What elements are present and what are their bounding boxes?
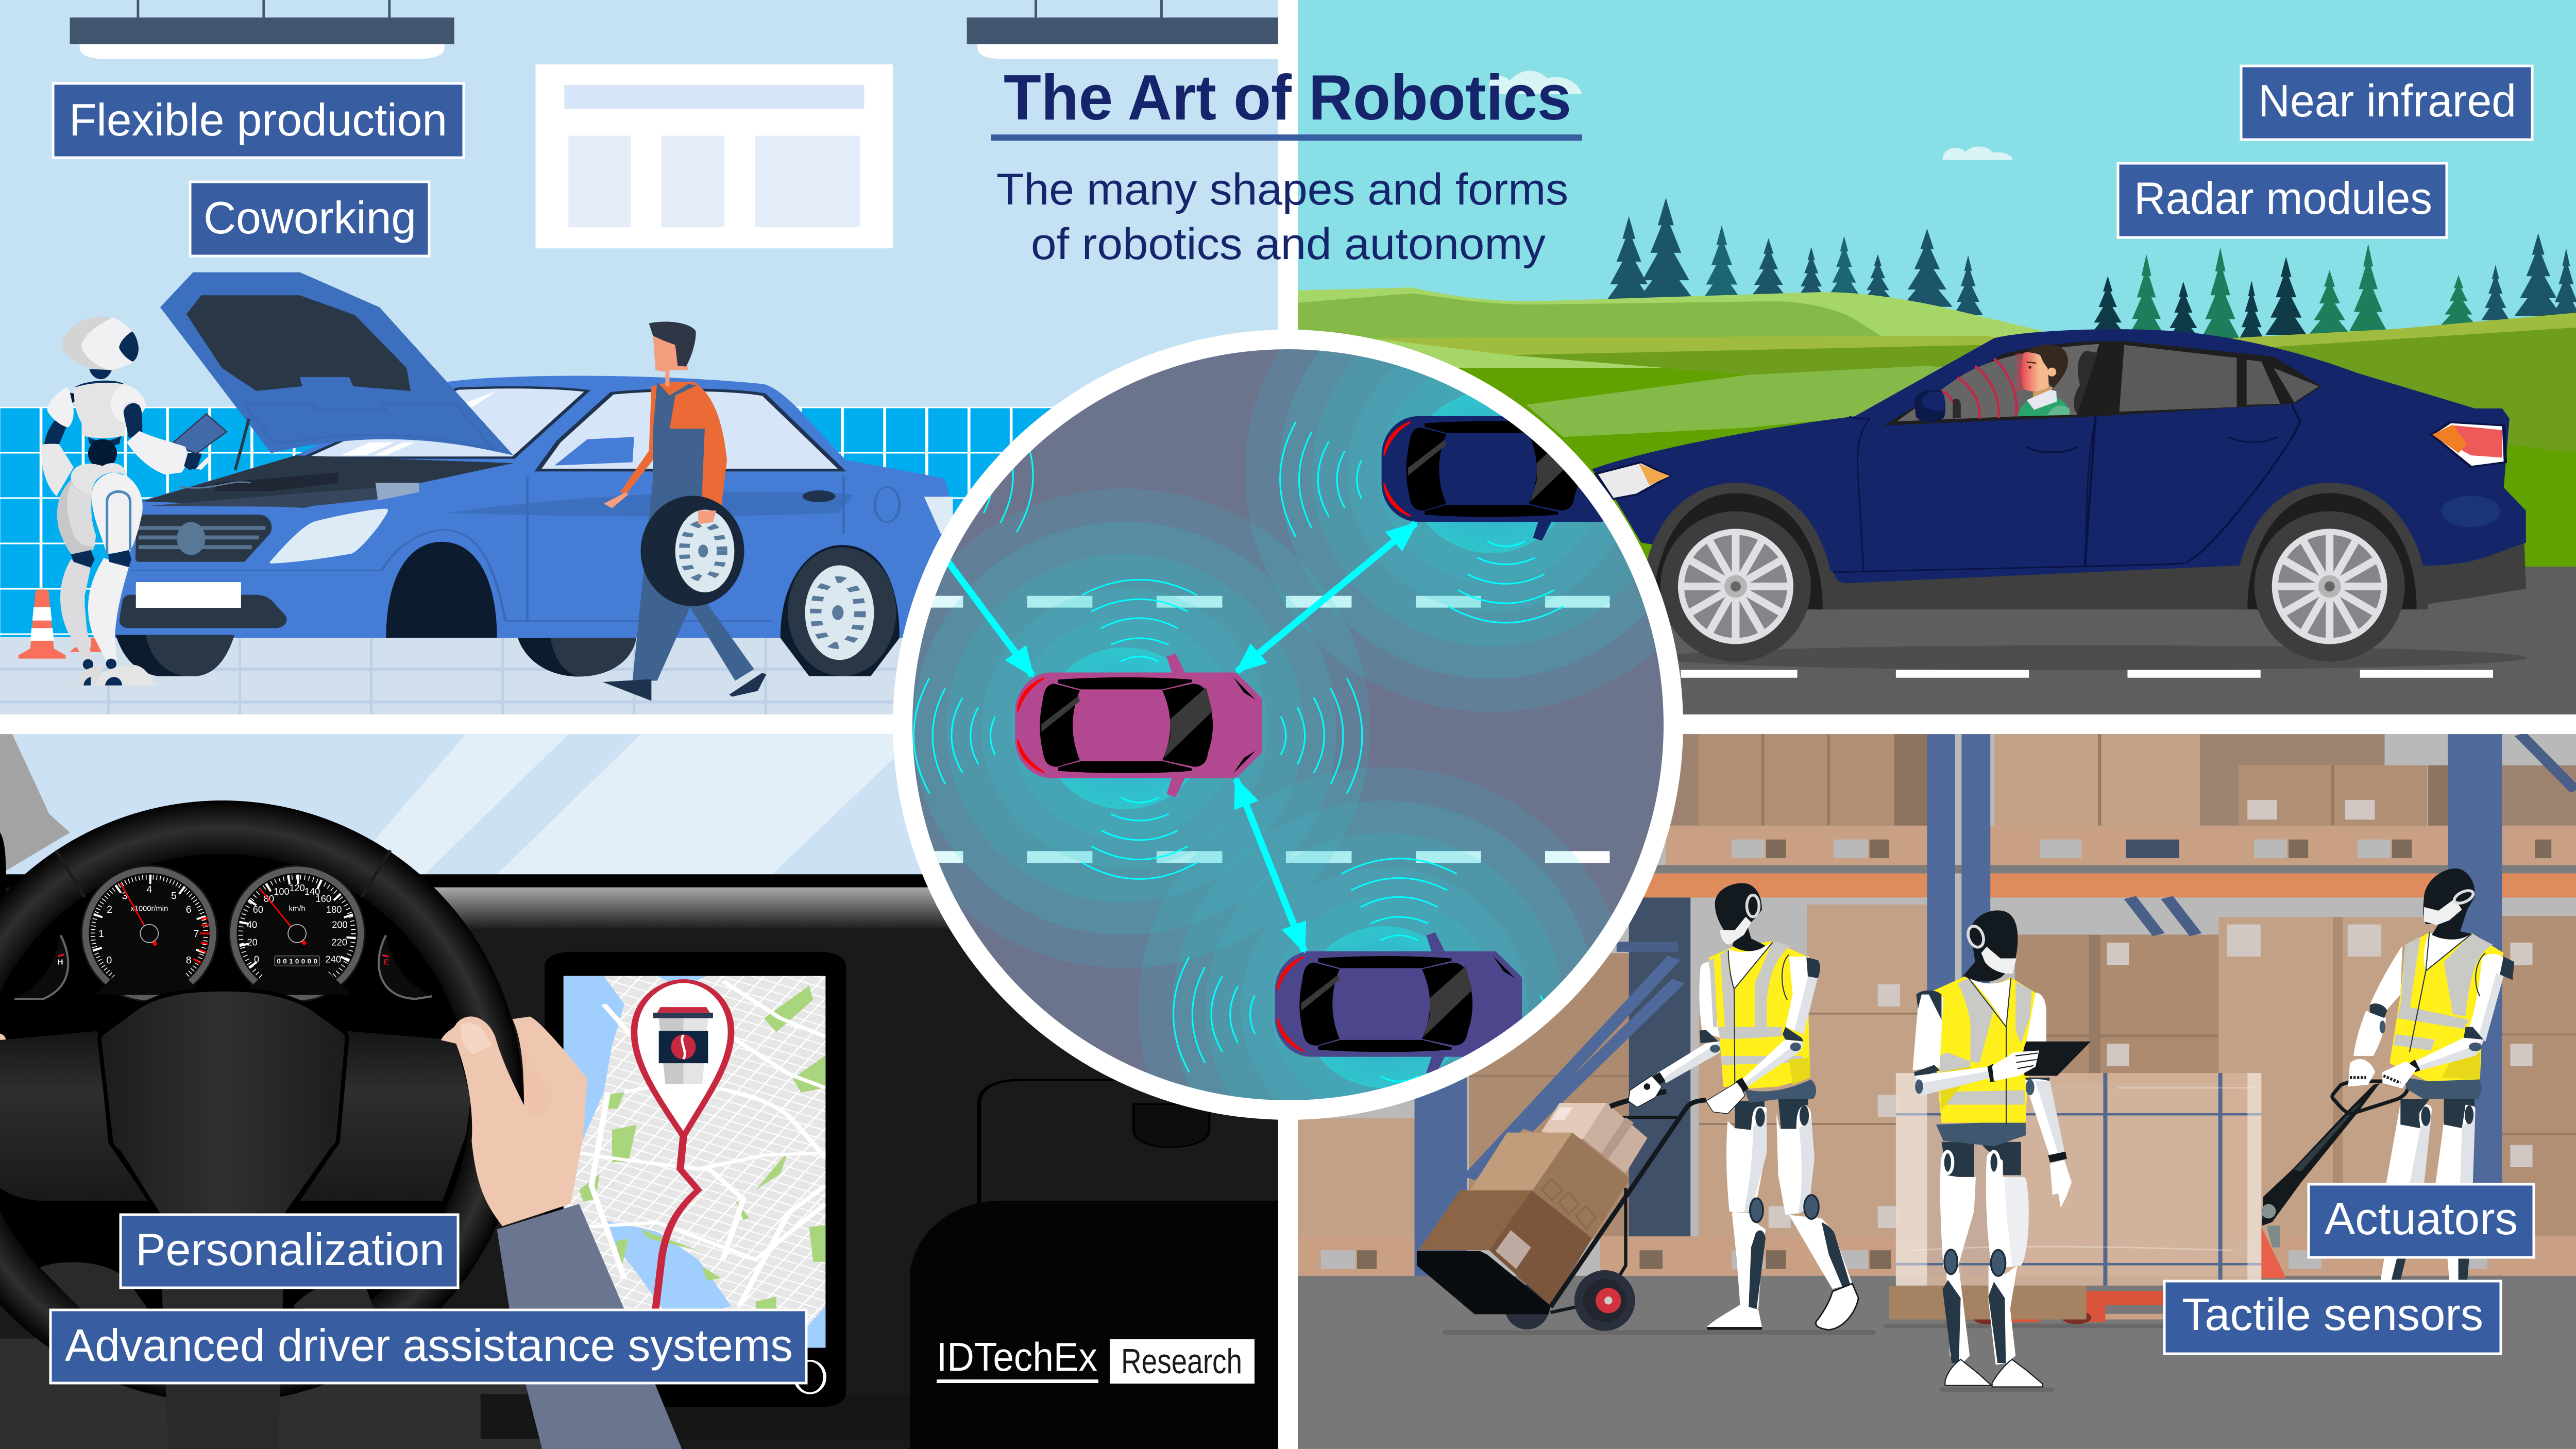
bumper reflector	[2442, 496, 2500, 527]
tail lamp	[2431, 422, 2505, 467]
speedometer: 120	[289, 882, 305, 893]
hand truck and robot one	[1417, 883, 1858, 1331]
pallet truck handle	[2261, 1081, 2408, 1248]
robot one	[1628, 883, 1858, 1330]
wheel spokes	[0, 1031, 471, 1201]
rear windows	[2120, 345, 2319, 412]
side mirror	[554, 437, 634, 466]
route line	[655, 1136, 698, 1310]
wheel interior	[0, 854, 470, 1349]
tachometer: 8	[186, 954, 192, 966]
hips and thighs	[57, 463, 143, 554]
open bonnet	[160, 272, 513, 455]
handle	[1610, 1092, 1666, 1106]
left arm	[1912, 991, 2039, 1096]
front wheel	[1574, 1270, 1635, 1331]
tablet	[2023, 1042, 2091, 1076]
sills and bumper	[1814, 540, 2526, 609]
label: Flexible production: Flexible production	[69, 94, 447, 145]
subtitle: The many shapes and forms	[996, 165, 1568, 214]
left pillar strip	[0, 832, 6, 899]
sky	[1288, 0, 2576, 721]
lower legs	[60, 550, 131, 670]
front arm	[124, 403, 209, 474]
glove compartment	[979, 1080, 1288, 1204]
right arm	[2025, 993, 2072, 1207]
robot three pulling truck	[2348, 868, 2514, 1280]
label: Advanced driver assistance systems	[50, 1310, 806, 1383]
bottom box	[1419, 1190, 1592, 1306]
headlamp	[1596, 462, 1670, 499]
front wheel	[1641, 483, 1834, 661]
circular road scene	[876, 232, 1737, 1247]
signal rings car 3	[1138, 768, 1630, 1247]
driver hand	[441, 1016, 587, 1226]
distant forest left	[1604, 198, 1983, 315]
central circle: connected vehicles	[876, 232, 1737, 1247]
navy car	[1592, 329, 2526, 661]
headlight	[269, 509, 388, 564]
right arm	[2410, 953, 2514, 1072]
speedometer: 200	[332, 919, 348, 930]
panel: car factory coworking scene	[0, 0, 1288, 721]
lane markings	[898, 602, 1609, 857]
windscreen reflection	[341, 391, 497, 455]
side window	[538, 390, 842, 470]
rear wheel	[2235, 483, 2428, 661]
right thigh and shin	[1986, 1150, 2043, 1387]
ceiling lamp left	[70, 0, 454, 59]
legs	[633, 479, 754, 680]
head	[2424, 868, 2475, 940]
hands	[2348, 1059, 2417, 1088]
A pillar	[0, 734, 70, 874]
panel: autonomous car in countryside	[1288, 0, 2576, 721]
arrow between car 1 and car 3	[1236, 779, 1304, 951]
number plate	[136, 582, 241, 608]
left hand	[1628, 1072, 1666, 1107]
rear wheel	[1504, 1285, 1549, 1329]
radar arcs car 2	[1280, 422, 1564, 623]
speedometer: km/h	[289, 905, 306, 913]
map pin with coffee cup	[634, 981, 731, 1136]
tachometer: 0	[106, 954, 112, 966]
label: Near infrared: Near infrared	[2258, 75, 2516, 126]
vest	[1929, 977, 2036, 1124]
shorts	[1744, 1079, 1816, 1103]
speedometer: 20	[247, 936, 258, 947]
tachometer: 7	[193, 928, 199, 940]
traffic cones	[19, 589, 117, 659]
right forearm	[1740, 1027, 1804, 1086]
radar arcs car 3	[1174, 859, 1622, 1158]
shoes	[609, 674, 764, 698]
tachometer	[80, 865, 218, 1002]
door outline	[1833, 416, 2175, 572]
lower wheel column	[159, 1214, 285, 1449]
tachometer: 2	[107, 904, 112, 915]
label: Actuators	[2309, 1184, 2534, 1257]
radar arcs off-screen car	[984, 419, 1033, 532]
left forearm	[1657, 1030, 1720, 1083]
label: Radar modules	[2118, 163, 2447, 237]
lower pallets	[1298, 1236, 2576, 1276]
seat	[2074, 351, 2098, 415]
lower legs under the labels	[2381, 1258, 2459, 1280]
right hand	[1706, 1078, 1749, 1114]
rim stitching marks	[56, 850, 391, 897]
hand truck frame back	[1551, 1117, 1681, 1312]
right leg	[1776, 1099, 1858, 1330]
logo: IDTechEx Research	[937, 1334, 1255, 1384]
middle tyre	[517, 637, 637, 676]
bonnet strut	[235, 419, 249, 470]
car 3 purple	[1275, 932, 1522, 1076]
blue tiled wall band	[0, 406, 1054, 637]
mechanic carrying a tyre	[604, 321, 764, 698]
car front details and robot	[19, 316, 388, 686]
speedometer: 80	[264, 893, 274, 904]
engine bay	[142, 455, 514, 508]
door lines	[2085, 405, 2300, 567]
steering wheel and instrument cluster	[0, 800, 587, 1449]
green hills	[1288, 287, 2576, 568]
label: Advanced driver assistance systems: Advanced driver assistance systems	[65, 1320, 793, 1371]
side gauge right: E	[384, 958, 389, 966]
speedometer: 240	[326, 953, 341, 964]
label: Flexible production	[53, 83, 464, 158]
rear bumper strip	[924, 497, 953, 536]
window glass	[1896, 344, 2099, 421]
rear wheel	[781, 545, 900, 676]
shorts	[2406, 1078, 2482, 1099]
wing mirror	[1914, 390, 1961, 422]
driver	[2018, 345, 2071, 416]
lower shin darks	[2392, 1258, 2469, 1280]
warehouse floor	[1288, 1276, 2576, 1449]
windscreen	[0, 721, 1288, 879]
windscreen	[304, 387, 587, 457]
waist	[88, 436, 121, 468]
shirt	[620, 382, 727, 508]
red radar arcs	[1941, 359, 2016, 419]
hip joint	[1989, 1152, 1999, 1173]
arrow into car 1	[947, 560, 1032, 675]
arrow between car 1 and car 2	[1237, 523, 1416, 671]
speedometer: 180	[326, 904, 342, 915]
side gauge right	[379, 935, 432, 999]
panel: car cockpit with navigation	[0, 721, 1288, 1449]
left leg	[1707, 1101, 1767, 1330]
floor shadows	[1443, 1324, 2167, 1392]
factory window	[536, 64, 893, 248]
tachometer: 6	[186, 904, 192, 915]
upper shelf boxes	[1666, 734, 2576, 827]
left thigh and shin	[1940, 1152, 1991, 1386]
speedometer: 0	[254, 953, 259, 964]
top box	[1541, 1103, 1648, 1173]
shrink-wrapped pallet on pallet truck	[1889, 1073, 2261, 1324]
driver sleeve	[497, 1204, 682, 1449]
carried tyre	[641, 496, 744, 606]
rear arm	[1699, 962, 1720, 1038]
logo: IDTechEx Research: IDTechEx	[937, 1334, 1097, 1379]
head	[1715, 883, 1766, 951]
clouds	[1489, 71, 2012, 160]
side gauge left	[14, 935, 68, 999]
shelf uprights	[1415, 734, 2576, 1277]
tachometer: 3	[122, 891, 128, 902]
wheel hub	[99, 990, 347, 1215]
dashboard	[0, 874, 1288, 1449]
top pallets	[1666, 826, 2576, 865]
grille	[135, 515, 272, 562]
subtitle	[996, 165, 1568, 269]
robots two and three	[1912, 868, 2514, 1387]
logo: IDTechEx Research: Research	[1121, 1342, 1242, 1381]
overalls	[653, 429, 705, 485]
head	[653, 336, 688, 386]
robot inspecting the car	[41, 316, 227, 686]
label: Radar modules: Radar modules	[2134, 173, 2432, 224]
speedometer: 220	[332, 936, 347, 947]
hand	[604, 492, 629, 508]
front wheel arch	[386, 542, 497, 638]
label: Near infrared	[2241, 66, 2532, 140]
radar arcs car 1	[913, 579, 1362, 879]
rear arm	[41, 387, 76, 496]
city map	[564, 976, 825, 1348]
lower wheel trim	[40, 1262, 376, 1315]
label: Coworking: Coworking	[204, 192, 416, 243]
tachometer: 4	[146, 884, 152, 895]
white circle ring	[903, 339, 1673, 1110]
left fingers	[0, 1033, 6, 1042]
hips	[1941, 1142, 2021, 1177]
lower console	[910, 1201, 1288, 1449]
label: Personalization	[121, 1215, 458, 1288]
tachometer: 5	[171, 891, 177, 902]
thighs	[2386, 1099, 2476, 1184]
car 2 navy	[1382, 397, 1629, 541]
panel: humanoid robots in warehouse	[1288, 721, 2576, 1449]
torso	[74, 383, 146, 438]
bumper	[120, 595, 287, 628]
workshop floor	[0, 637, 903, 714]
shorts	[1936, 1121, 2026, 1146]
steering rim	[0, 800, 523, 1403]
car body	[115, 376, 953, 638]
factory wall	[0, 0, 1278, 407]
speedometer	[228, 865, 366, 1002]
warehouse back wall	[1288, 721, 2576, 1278]
signal rings car 2	[1245, 232, 1737, 712]
right upper arm	[1782, 954, 1820, 1034]
label: Tactile sensors: Tactile sensors	[2182, 1289, 2483, 1340]
front tyre	[115, 635, 234, 676]
tablet	[174, 414, 227, 454]
tablet home button	[795, 1361, 825, 1393]
title: The Art of Robotics	[1004, 62, 1571, 133]
speedometer: 0010000	[277, 957, 317, 965]
speedometer: 140	[304, 886, 320, 897]
feet	[78, 665, 157, 686]
label: Coworking	[190, 182, 429, 256]
speedometer: 40	[247, 919, 257, 930]
robot two with tablet	[1912, 910, 2091, 1387]
label: Actuators: Actuators	[2325, 1193, 2518, 1244]
ceiling lamp right	[967, 0, 1288, 59]
label: Tactile sensors	[2164, 1281, 2501, 1354]
navigation tablet	[545, 952, 846, 1407]
road	[1288, 567, 2576, 721]
vest	[2389, 932, 2503, 1081]
vest	[1709, 941, 1810, 1088]
shoulder yoke	[75, 381, 124, 388]
lower cabin trim	[0, 1338, 542, 1449]
tachometer: 1	[98, 928, 104, 940]
red face glow	[2015, 353, 2023, 391]
left arm	[2353, 946, 2402, 1056]
hand truck main frame	[1551, 1100, 1706, 1307]
window frame	[1884, 341, 2321, 425]
tachometer: x1000r/min	[130, 905, 168, 913]
distant forest right	[2090, 233, 2576, 342]
toe plate	[1417, 1251, 1551, 1314]
speedometer: 60	[253, 904, 263, 915]
pallet truck base	[2261, 1227, 2286, 1278]
shelf beams	[1641, 865, 2576, 897]
head	[62, 316, 139, 379]
signal rings car 1	[878, 488, 1370, 968]
speedometer: 100	[274, 886, 290, 897]
middle box	[1469, 1133, 1630, 1238]
hair	[649, 321, 696, 367]
side gauge left: H	[58, 958, 63, 966]
door handle	[2027, 447, 2077, 452]
subtitle: of robotics and autonomy	[1031, 219, 1546, 269]
body crease and handle	[131, 476, 900, 621]
body	[1592, 329, 2526, 583]
speedometer: 160	[316, 893, 331, 904]
head	[1963, 910, 2018, 982]
car front window with driver	[1833, 344, 2175, 572]
blue car with open bonnet	[115, 272, 953, 676]
centre console lower panel	[481, 1394, 910, 1439]
left hip joint	[1943, 1152, 1953, 1173]
mid-level boxes	[1298, 905, 2576, 1239]
car 1 magenta	[1015, 654, 1262, 797]
label: Personalization: Personalization	[135, 1224, 445, 1275]
